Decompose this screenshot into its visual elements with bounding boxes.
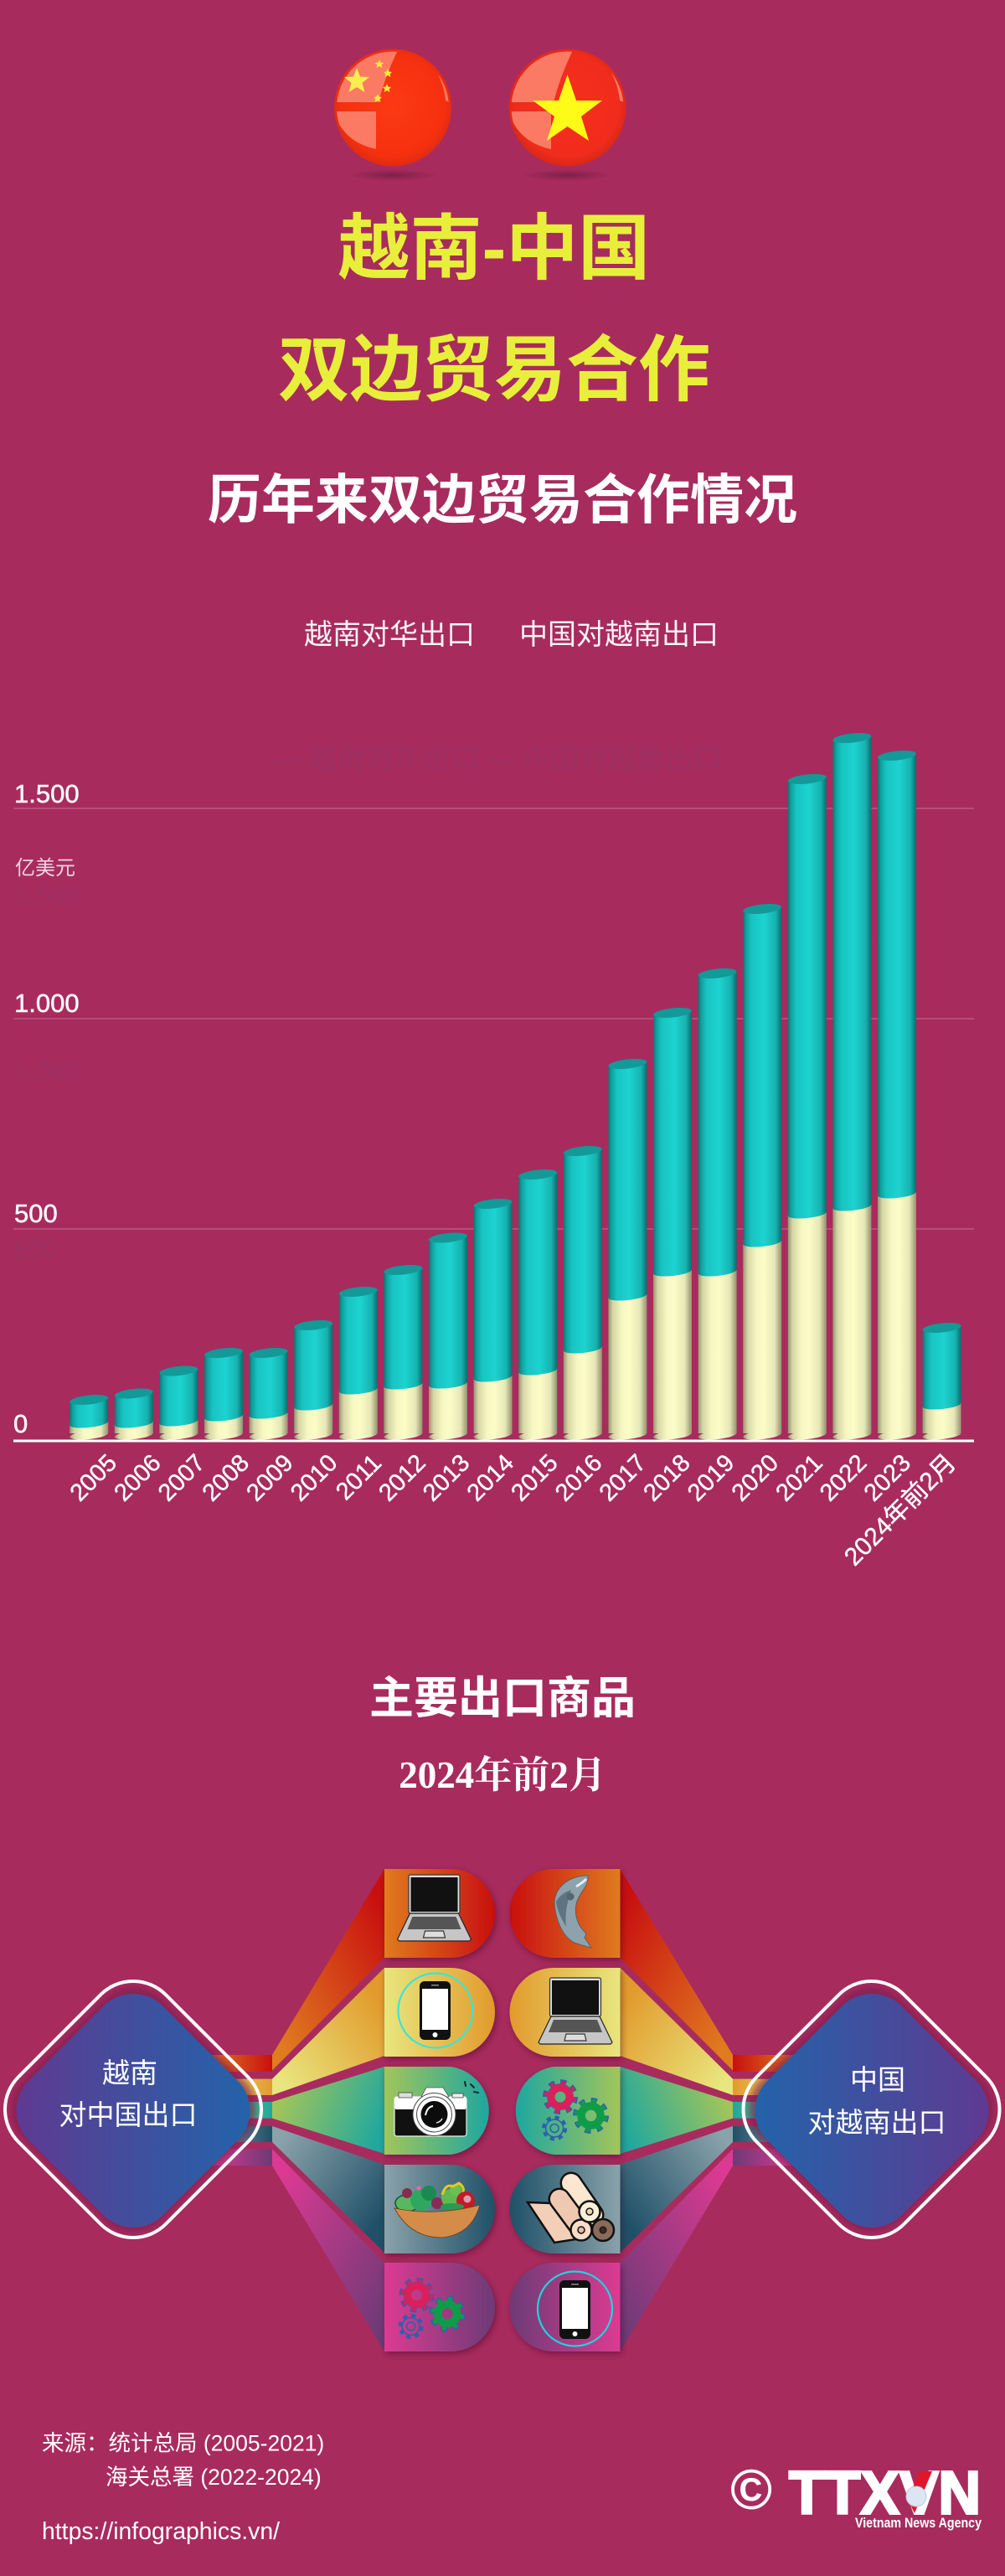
icon: phone bbox=[399, 1974, 472, 2047]
subtitle: 历年来双边贸易合作情况 bbox=[208, 470, 797, 530]
bar 2005 bbox=[70, 1393, 109, 1441]
pill: cameras bbox=[384, 2067, 489, 2155]
title: 越南-中国 bbox=[338, 209, 650, 289]
bar 2013 bbox=[429, 1231, 467, 1441]
x axis year labels: 2016 bbox=[550, 1449, 607, 1507]
title: 双边贸易合作 bbox=[278, 330, 710, 410]
x axis year labels: 2022 bbox=[815, 1449, 872, 1507]
bar 2020 bbox=[743, 902, 782, 1441]
diamond label: 对中国出口 bbox=[59, 2099, 198, 2130]
ghost legend and axis labels bbox=[14, 743, 721, 1264]
logo: TTXVN bbox=[730, 2458, 982, 2531]
ghost legend and axis labels: 1.500 bbox=[14, 881, 80, 911]
icon: gears bbox=[544, 2083, 606, 2139]
diamond outline bbox=[724, 1962, 1005, 2257]
x axis year labels: 2007 bbox=[153, 1449, 210, 1507]
icon: fabric rolls bbox=[528, 2183, 614, 2243]
bar 2011 bbox=[338, 1285, 378, 1441]
icon: phone bbox=[538, 2272, 612, 2346]
fans bbox=[272, 1869, 384, 2351]
bar 2022 bbox=[832, 731, 872, 1441]
ghost legend and axis labels: — 越南对华出口 bbox=[272, 743, 479, 775]
bar 2010 bbox=[294, 1319, 333, 1441]
x axis year labels: 2005 bbox=[65, 1449, 122, 1507]
bar 2017 bbox=[608, 1057, 647, 1441]
x axis year labels: 2006 bbox=[109, 1449, 167, 1507]
x axis year labels: 2008 bbox=[198, 1449, 255, 1507]
x axis year labels: 2023 bbox=[859, 1449, 916, 1507]
x axis year labels: 2010 bbox=[286, 1449, 343, 1507]
logo: TTXVN: © bbox=[730, 2458, 772, 2522]
bar 2016 bbox=[563, 1144, 602, 1441]
icon: China flag ball bbox=[332, 49, 451, 181]
connector bars bbox=[209, 2055, 272, 2166]
icon: salad bowl bbox=[394, 2183, 480, 2238]
diamond label: 对越南出口 bbox=[807, 2107, 946, 2138]
icon: gears bbox=[400, 2280, 462, 2337]
x axis year labels: 2019 bbox=[683, 1449, 740, 1507]
pill: computers bbox=[509, 1968, 620, 2057]
pill: machinery bbox=[516, 2067, 620, 2155]
y axis unit: 亿美元 bbox=[15, 857, 75, 880]
panel: China exports to Vietnam bbox=[509, 1869, 1005, 2351]
x axis year labels: 2020 bbox=[727, 1449, 784, 1507]
logo: TTXVN: Vietnam News Agency bbox=[855, 2516, 982, 2531]
pill: phones bbox=[509, 2263, 620, 2351]
x axis year labels: 2021 bbox=[770, 1449, 828, 1507]
x axis year labels: 2009 bbox=[241, 1449, 299, 1507]
x axis year labels: 2014 bbox=[462, 1449, 519, 1507]
legend bbox=[304, 619, 719, 651]
legend: 越南对华出口 bbox=[304, 619, 475, 651]
bar 2019 bbox=[698, 967, 737, 1441]
icon: laptop bbox=[397, 1875, 471, 1941]
halo behind diamond bbox=[732, 1969, 1005, 2249]
source note bbox=[42, 2431, 324, 2490]
source note: 来源：统计总局 (2005-2021) bbox=[42, 2431, 324, 2456]
x axis year labels bbox=[65, 1449, 961, 1572]
y axis labels bbox=[13, 779, 80, 1438]
website url: https://infographics.vn/ bbox=[42, 2518, 280, 2545]
source note: 海关总署 (2022-2024) bbox=[106, 2465, 322, 2490]
bar 2006 bbox=[114, 1387, 153, 1441]
y axis labels: 1.500 bbox=[14, 779, 80, 808]
ghost legend and axis labels: — 中国对越南出口 bbox=[486, 743, 721, 775]
x axis year labels: 2012 bbox=[374, 1449, 431, 1507]
section heading: 主要出口商品 bbox=[369, 1674, 636, 1723]
bar 2014 bbox=[473, 1197, 513, 1441]
x axis year labels: 2013 bbox=[418, 1449, 475, 1507]
diamond label: 中国 bbox=[850, 2064, 905, 2095]
y axis labels: 0 bbox=[13, 1409, 28, 1438]
icon: camera bbox=[394, 2082, 478, 2136]
diamond label: 越南 bbox=[102, 2057, 157, 2088]
ghost legend and axis labels: 1.000 bbox=[14, 1057, 80, 1087]
section date: 2024年前2月 bbox=[399, 1754, 606, 1796]
x axis year labels: 2015 bbox=[506, 1449, 564, 1507]
y axis gridlines bbox=[13, 808, 974, 1229]
pill: vegetables and fruit bbox=[384, 2165, 495, 2253]
diamond bbox=[0, 1976, 267, 2245]
pill: fish and seafood bbox=[509, 1869, 620, 1958]
pill: computers bbox=[384, 1869, 495, 1958]
logo: TTXVN: TTXVN bbox=[789, 2460, 981, 2527]
diamond label bbox=[59, 2057, 198, 2130]
legend: 中国对越南出口 bbox=[519, 619, 719, 651]
pill: phones bbox=[384, 1968, 495, 2057]
bar chart bbox=[70, 731, 961, 1441]
fans bbox=[620, 1869, 733, 2351]
halo behind diamond bbox=[0, 1969, 273, 2249]
connector bars bbox=[733, 2055, 796, 2166]
pill: fabrics bbox=[509, 2165, 620, 2253]
bar 2012 bbox=[384, 1263, 423, 1441]
icon: Vietnam flag ball bbox=[508, 49, 626, 181]
diamond outline bbox=[0, 1962, 281, 2257]
bar 2015 bbox=[518, 1168, 558, 1441]
x axis line bbox=[13, 1439, 974, 1443]
y axis labels: 1.000 bbox=[14, 989, 80, 1018]
title bbox=[278, 209, 710, 410]
icon: laptop bbox=[539, 1978, 612, 2044]
bar 2021 bbox=[787, 772, 827, 1441]
pill: machinery bbox=[384, 2263, 495, 2351]
panel: Vietnam exports to China bbox=[0, 1869, 495, 2351]
diamond label bbox=[807, 2064, 946, 2138]
bar 2009 bbox=[249, 1346, 288, 1441]
x axis year labels: 2011 bbox=[331, 1449, 387, 1505]
diamond bbox=[738, 1976, 1005, 2245]
ghost legend and axis labels: 500 bbox=[14, 1235, 58, 1264]
bar 2007 bbox=[159, 1365, 198, 1441]
bar 2023 bbox=[878, 749, 916, 1441]
y axis labels: 500 bbox=[14, 1199, 58, 1228]
bar 2024 first two months bbox=[922, 1321, 961, 1441]
bar 2018 bbox=[653, 1006, 692, 1441]
x axis year labels: 2024年前2月 bbox=[839, 1449, 961, 1572]
x axis year labels: 2018 bbox=[638, 1449, 696, 1507]
bar 2008 bbox=[204, 1346, 243, 1441]
x axis year labels: 2017 bbox=[595, 1449, 652, 1507]
icon: fish bbox=[554, 1876, 591, 1948]
